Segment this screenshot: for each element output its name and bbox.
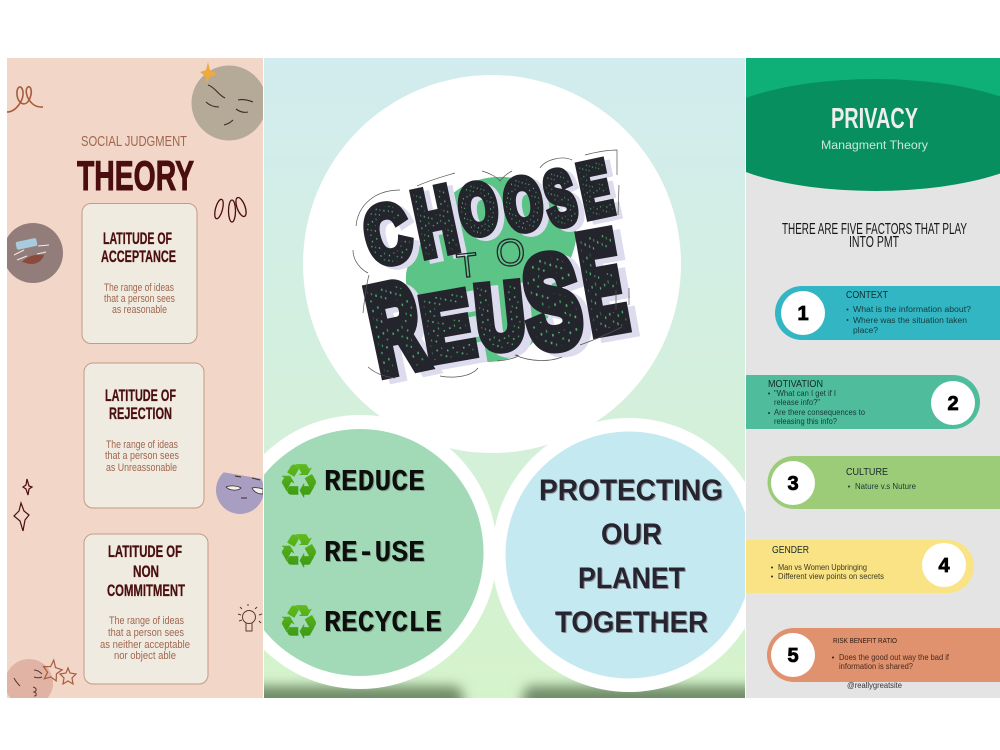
card: latitude of rejection: LATITUDE OF bbox=[105, 386, 176, 405]
word: choose: C bbox=[355, 185, 419, 283]
slogan text: PLANET bbox=[578, 562, 685, 595]
word: reuse: E bbox=[570, 205, 635, 361]
subtitle: Managment Theory bbox=[821, 140, 928, 152]
factor 1: context: 1 bbox=[797, 303, 809, 325]
icon: recycle 3: ♻ bbox=[278, 595, 320, 649]
circle: reduce reuse recycle bbox=[264, 415, 495, 689]
factor 3: culture bbox=[768, 456, 1000, 509]
decoration: orange star bbox=[200, 62, 217, 83]
decoration: annoyed face bbox=[216, 472, 263, 514]
label: recycle: RECYCLE bbox=[325, 607, 443, 642]
factor 1: context: What is the information about? bbox=[853, 305, 972, 314]
label: re-use: RE-USE bbox=[324, 536, 425, 571]
factor 1: context: CONTEXT bbox=[846, 290, 888, 301]
card: latitude of rejection: REJECTION bbox=[109, 404, 172, 423]
label: reduce bbox=[326, 470, 425, 492]
slogan text bbox=[539, 474, 723, 639]
circle: protecting our planet together: PROTECTING bbox=[540, 475, 724, 508]
factor 5: risk benefit ratio: 5 bbox=[787, 645, 799, 667]
card: latitude of acceptance: as reasonable bbox=[112, 304, 167, 316]
word: choose bbox=[363, 156, 618, 267]
letter shadows: S bbox=[543, 158, 590, 246]
card: latitude of rejection bbox=[84, 363, 204, 508]
factor 2: motivation: releasing this info? bbox=[774, 417, 838, 426]
green blob bbox=[406, 177, 576, 362]
word: choose: S bbox=[537, 155, 584, 243]
decoration: leaves bbox=[213, 196, 248, 222]
letter shadows: O bbox=[460, 170, 508, 254]
circle: protecting our planet together: PLANET bbox=[579, 563, 686, 596]
subheading: SOCIAL JUDGMENT bbox=[81, 133, 187, 150]
factor 2: motivation bbox=[746, 375, 980, 429]
circle: protecting our planet together: TOGETHER bbox=[556, 607, 709, 640]
word: reuse: E bbox=[414, 273, 480, 381]
factor 1: context bbox=[775, 286, 1000, 340]
lettering: choose to reuse bbox=[353, 146, 643, 403]
card: latitude of acceptance: ACCEPTANCE bbox=[101, 247, 176, 266]
word: reuse: S bbox=[516, 230, 588, 375]
card: latitude of non commitment: nor object able bbox=[114, 650, 176, 662]
letter shadows: E bbox=[578, 209, 643, 365]
label: reduce: REDUCE bbox=[325, 466, 426, 501]
word: to: O bbox=[494, 231, 527, 276]
title: THEORY bbox=[77, 152, 194, 199]
factor 4: gender: GENDER bbox=[772, 545, 809, 556]
header ellipse bbox=[746, 79, 1000, 191]
decoration: bandaged face circle bbox=[3, 223, 63, 283]
ground shadow right bbox=[515, 678, 745, 698]
factor 5: risk benefit ratio: RISK BENEFIT RATIO bbox=[833, 636, 897, 645]
letter shadows bbox=[380, 160, 640, 384]
factor 2: motivation: 2 bbox=[947, 393, 959, 415]
intro text bbox=[782, 221, 967, 251]
word: choose: H bbox=[406, 168, 465, 275]
factor 4: gender: Man vs Women Upbringing bbox=[778, 563, 867, 572]
factor 3: culture: Nature v.s Nuture bbox=[855, 482, 917, 491]
title: privacy: PRIVACY bbox=[831, 103, 918, 135]
panel: choose to reuse bbox=[264, 58, 745, 698]
word: reuse: R bbox=[357, 257, 433, 399]
word: to bbox=[456, 238, 524, 278]
decoration: squiggle bbox=[7, 87, 43, 112]
letter shadows: C bbox=[361, 188, 425, 286]
letter shadows: R bbox=[365, 261, 441, 403]
word: reuse bbox=[362, 225, 632, 380]
ground shadow left bbox=[264, 678, 471, 698]
card: latitude of rejection: that a person sees bbox=[105, 450, 179, 462]
factor 4: gender: 4 bbox=[938, 555, 950, 577]
card: latitude of acceptance: LATITUDE OF bbox=[103, 229, 172, 248]
label: re-use bbox=[326, 540, 425, 562]
letter shadows: H bbox=[412, 171, 471, 278]
factor 1: context: Where was the situation taken bbox=[853, 316, 967, 325]
letter shadows: S bbox=[524, 234, 596, 379]
factor 4: gender: Different view points on secrets bbox=[778, 572, 884, 581]
factor 5: risk benefit ratio bbox=[767, 628, 1000, 682]
header band bbox=[746, 58, 1000, 98]
card: latitude of non commitment: as neither acceptable bbox=[100, 639, 190, 651]
circle: protecting our planet together: OUR bbox=[602, 519, 663, 552]
panel: social judgment theory bbox=[3, 58, 266, 707]
card: latitude of non commitment: NON bbox=[133, 562, 159, 581]
factor 5: risk benefit ratio: information is shared? bbox=[839, 662, 914, 671]
slogan text: PROTECTING bbox=[539, 474, 723, 507]
word: to: T bbox=[455, 246, 480, 286]
factor 4: gender bbox=[746, 540, 974, 593]
icon: recycle 1: ♻ bbox=[278, 454, 320, 508]
factor 2: motivation: release info?" bbox=[774, 398, 820, 407]
big white circle bbox=[303, 75, 681, 453]
card: latitude of non commitment bbox=[84, 534, 208, 684]
label: recycle: RECYCLE bbox=[324, 606, 442, 641]
factor 2: motivation: MOTIVATION bbox=[768, 379, 823, 390]
card: latitude of rejection: The range of ideas bbox=[106, 439, 178, 451]
factor 5: risk benefit ratio: Does the good out way the bad if bbox=[839, 653, 950, 662]
card: latitude of acceptance: The range of ideas bbox=[104, 282, 174, 294]
card: latitude of non commitment: The range of ideas bbox=[109, 615, 184, 627]
card: latitude of non commitment: that a person sees bbox=[108, 627, 184, 639]
letter shadows: U bbox=[479, 268, 537, 373]
card: latitude of rejection: as Unreassonable bbox=[106, 462, 177, 474]
factor 3: culture: CULTURE bbox=[846, 467, 888, 478]
decoration: light bulb bbox=[238, 604, 262, 631]
card: latitude of non commitment: LATITUDE OF bbox=[108, 542, 182, 561]
decoration: sleeping face circle bbox=[192, 66, 266, 140]
circle: protecting our planet together bbox=[492, 418, 766, 692]
factor 3: culture: 3 bbox=[787, 473, 799, 495]
letter shadows: E bbox=[422, 277, 488, 385]
panel: privacy management theory bbox=[746, 58, 1000, 698]
word: choose: O bbox=[499, 162, 548, 248]
icon: recycle 2: ♻ bbox=[278, 524, 320, 578]
intro text: INTO PMT bbox=[849, 234, 899, 251]
word: choose: E bbox=[572, 146, 619, 234]
factor 1: context: place? bbox=[853, 326, 879, 335]
label: re-use: RE-USE bbox=[325, 537, 426, 572]
decoration: kissing face bbox=[7, 659, 53, 698]
card: latitude of non commitment: COMMITMENT bbox=[107, 581, 185, 600]
slogan text: TOGETHER bbox=[555, 606, 708, 639]
decoration: stars bbox=[41, 659, 76, 684]
factor 2: motivation: "What can I get if I bbox=[774, 389, 836, 398]
label: recycle bbox=[326, 610, 442, 632]
card: latitude of acceptance: that a person sees bbox=[104, 293, 175, 305]
factor 2: motivation: Are there consequences to bbox=[774, 408, 866, 417]
letter shadows: E bbox=[578, 149, 625, 237]
word: reuse: U bbox=[471, 264, 529, 369]
decoration: sparkles bbox=[14, 479, 32, 531]
outline strokes bbox=[353, 150, 629, 378]
slogan text: OUR bbox=[601, 518, 662, 551]
label: reduce: REDUCE bbox=[324, 465, 425, 500]
word: choose: O bbox=[454, 167, 502, 251]
card: latitude of acceptance bbox=[82, 204, 197, 344]
website handle: @reallygreatsite bbox=[847, 681, 903, 690]
letter shadows: O bbox=[505, 165, 554, 251]
